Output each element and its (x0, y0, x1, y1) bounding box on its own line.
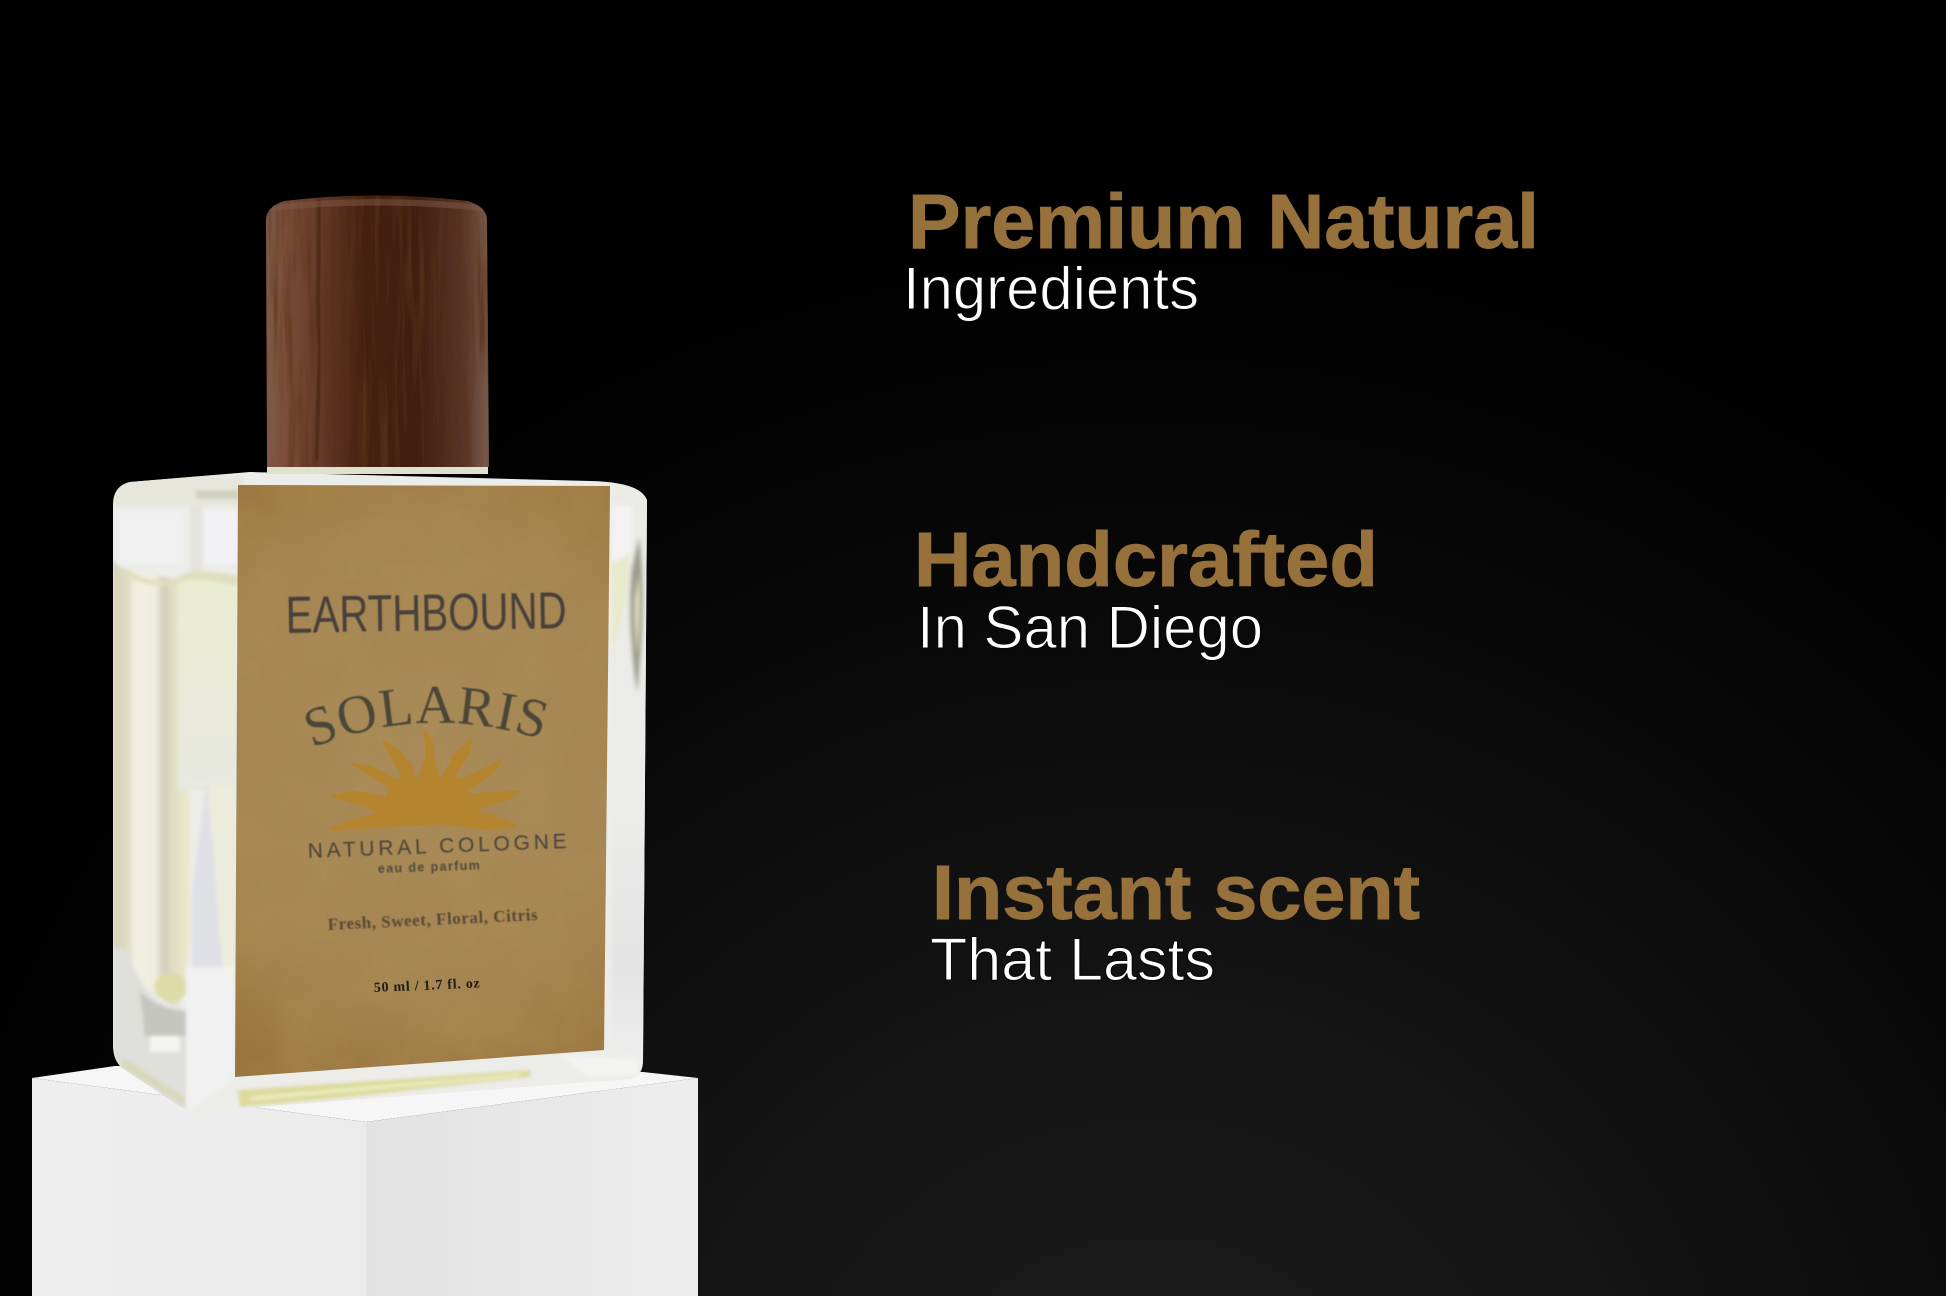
heading: Handcrafted (914, 517, 1378, 603)
icon: sun (332, 732, 518, 830)
perfume bottle (113, 196, 647, 1108)
subheading: In San Diego (917, 594, 1263, 661)
feature: instant scent that lasts (930, 850, 1420, 993)
brand name: EARTHBOUND (285, 582, 567, 645)
neck collar (267, 464, 488, 474)
glass body (110, 470, 650, 1115)
subheading: That Lasts (930, 926, 1215, 993)
heading: Premium Natural (908, 179, 1539, 265)
feature: premium natural ingredients (903, 179, 1539, 322)
pedestal (32, 1066, 698, 1296)
eau de parfum: eau de parfum (378, 858, 480, 876)
wooden cap (262, 190, 492, 470)
volume: 50 ml / 1.7 fl. oz (374, 976, 480, 996)
subheading: Ingredients (903, 255, 1199, 322)
paper label (235, 485, 610, 1077)
product name (305, 686, 547, 746)
heading: Instant scent (932, 850, 1420, 936)
scent notes: Fresh, Sweet, Floral, Citris (327, 905, 538, 934)
feature: handcrafted in San Diego (914, 517, 1378, 661)
product name: SOLARIS (305, 686, 547, 746)
product type: NATURAL COLOGNE (307, 830, 567, 863)
